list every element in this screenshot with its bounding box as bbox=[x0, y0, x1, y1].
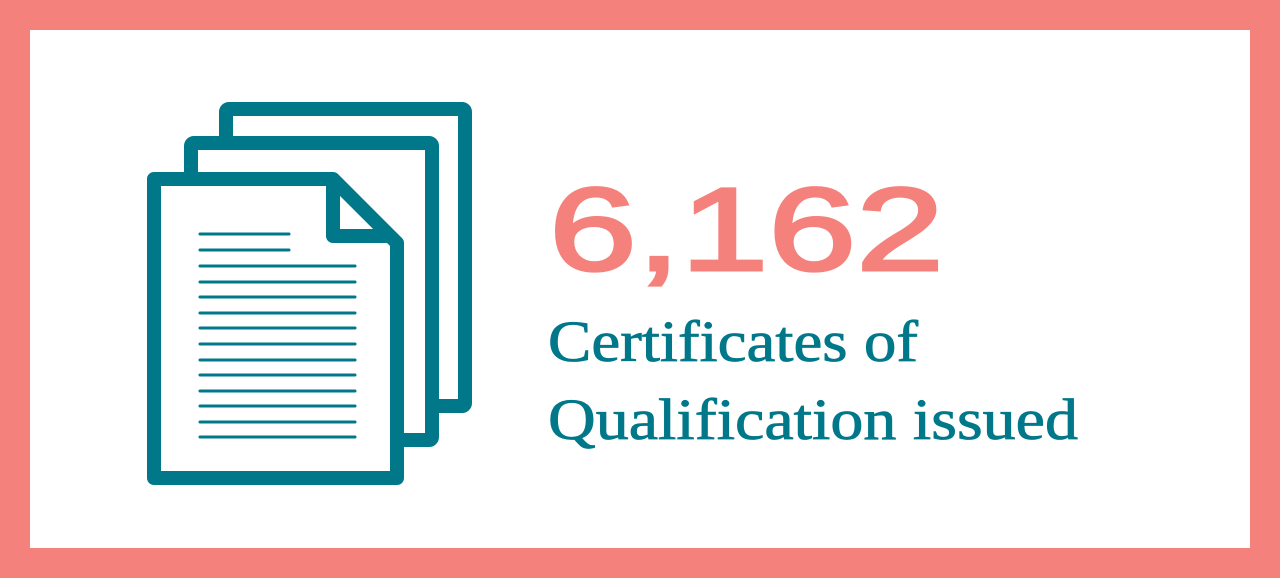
caption: Certificates of bbox=[548, 309, 919, 374]
caption bbox=[548, 309, 1078, 452]
caption: Qualification issued bbox=[548, 387, 1078, 452]
big number: 6,162 bbox=[549, 164, 944, 296]
icon: stacked documents bbox=[154, 109, 465, 478]
